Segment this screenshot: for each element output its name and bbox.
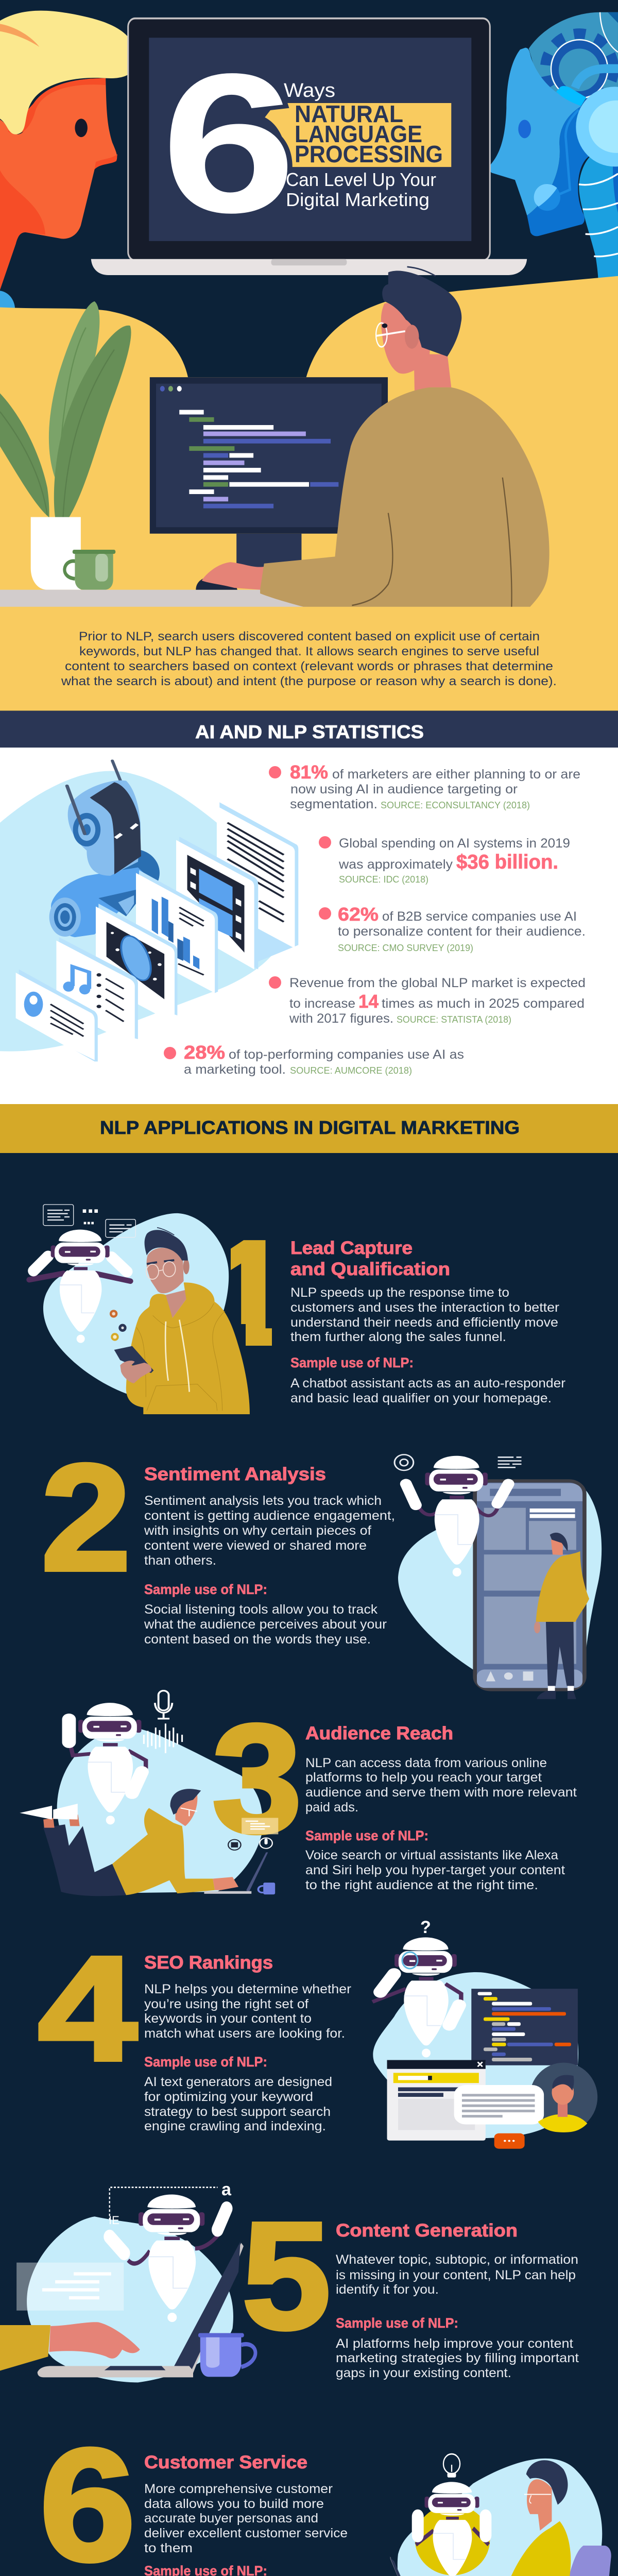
panel: 3 audience reach [20,1691,577,1896]
text: lead capture: A chatbot assistant acts as an auto-responder [290,1376,565,1391]
chatbot [394,1937,457,2057]
text: lead capture: understand their needs and efficiently move [290,1315,558,1330]
stat: 62% of B2B: SOURCE: CMO SURVEY (2019) [338,943,473,953]
stat: 81% of marketers: now using AI in audience targeting or [290,782,518,796]
text: customer service: accurate buyer personas and [144,2511,318,2526]
chatbot [425,1456,488,1577]
letter a: a [221,2180,232,2199]
title: big 6: 6 [161,32,296,254]
title: text lines [284,80,443,210]
stat: 28% of top-performing [164,1042,464,1077]
illustration: person and icons [20,1691,278,1896]
text: SEO rankings: Sample use of NLP: [144,2054,267,2070]
text: SEO rankings: engine crawling and indexing. [144,2119,326,2133]
stat: 28% of top-performing: a marketing tool. [184,1062,286,1077]
text: content generation: AI platforms help improve your content [336,2336,573,2351]
stat: $36 billion [319,836,570,885]
text: SEO rankings [144,1953,351,2133]
chatbot [139,2195,204,2322]
panel: AI and NLP statistics [0,711,618,1104]
illustration: man with phone and chatbot [29,1205,250,1414]
stat: 28% of top-performing: 28% [184,1042,225,1063]
big number 2: 2 [41,1433,131,1602]
heading band: statistics [0,711,618,748]
big number 3: 3 [212,1693,302,1865]
title: text lines: Digital Marketing [286,189,430,210]
panel: 1 lead capture [29,1205,565,1414]
panel: 5 content generation [0,2180,579,2382]
illustration: chatbot with code panel and browser [372,1972,597,2149]
big number 4: 4 [38,1926,138,2092]
stat: 62% of B2B: 62% [338,904,379,925]
magnifier [402,1952,418,1969]
text: audience reach: to the right audience at the right time. [305,1878,538,1892]
stat: 62% of B2B: to personalize content for their audience. [338,924,586,939]
stat: 14 times [269,976,586,1026]
text: sentiment analysis: Social listening tools allow you to track [144,1602,378,1617]
text: content generation: gaps in your existing content. [336,2366,511,2380]
letters IE: IE [109,2214,119,2227]
illustration: AI head [490,12,618,282]
stat: $36 billion: Global spending on AI systems in 2019 [339,836,570,851]
heading band: NLP applications: NLP APPLICATIONS IN DIGITAL MARKETING [100,1117,520,1138]
text: sentiment analysis: content is getting audience engagement, [144,1509,395,1523]
title: yellow banner [265,103,451,167]
chatbot [425,2482,479,2576]
text: customer service: Customer Service [144,2452,307,2472]
white background [0,747,618,1104]
stat: 14 times: times as much in 2025 compared [382,996,585,1011]
text: lead capture: Lead Capture [290,1238,413,1258]
illustration: person on couch with chatbot [390,2454,611,2576]
illustration: phone, chatbot and person [394,1454,602,1699]
stat: 62% of B2B [319,904,586,953]
text: content generation: marketing strategies by filling important [336,2351,579,2365]
chatbot [78,1703,141,1824]
stat: $36 billion: SOURCE: IDC (2018) [339,874,428,885]
stat: 14 times: to increase [289,996,355,1011]
big number 1: 1 [209,1210,291,1378]
text: SEO rankings: AI text generators are designed [144,2075,332,2089]
text: lead capture [290,1238,565,1405]
text: audience reach: platforms to help you reach your target [305,1770,542,1785]
illustration: isometric robot and media pages [0,760,298,1061]
panel: 4 SEO rankings [38,1918,597,2149]
text: content generation: identify it for you. [336,2282,439,2297]
heading band: statistics: AI AND NLP STATISTICS [195,721,424,742]
title: text lines: Ways [284,80,335,101]
panel: 6 customer service [40,2415,611,2576]
stat: 14 times: with 2017 figures. [289,1011,393,1026]
text: lead capture: NLP speeds up the response time to [290,1285,509,1300]
title: text lines: NATURAL [295,100,403,127]
illustration: laptop [91,19,527,275]
text: audience reach: Audience Reach [305,1723,453,1743]
panel: hero [0,11,618,711]
panel: 2 sentiment analysis [41,1433,602,1699]
text: customer service: data allows you to build more [144,2497,324,2511]
text: sentiment analysis: what the audience perceives about your [144,1617,387,1632]
text: sentiment analysis: Sample use of NLP: [144,1582,267,1597]
illustration: monitor with code [150,377,388,568]
text: audience reach [305,1723,577,1892]
text: content generation: is missing in your content, NLP can help [336,2268,576,2282]
text: customer service: deliver excellent customer service [144,2526,348,2540]
text: SEO rankings: NLP helps you determine whether [144,1982,351,1996]
intro paragraph: content to searchers based on context (relevant words or phrases that determine [65,659,553,673]
text: lead capture: and Qualification [290,1259,450,1279]
stat: 14 times: Revenue from the global NLP market is expected [289,976,586,990]
text: content generation [336,2221,579,2380]
yellow background [0,276,618,711]
text: audience reach: Sample use of NLP: [305,1828,428,1843]
text: audience reach: paid ads. [305,1800,358,1815]
text: sentiment analysis: Sentiment Analysis [144,1464,326,1484]
title [161,32,451,254]
intro paragraph [61,630,557,688]
title: text lines: PROCESSING [295,141,443,167]
title: text lines: Can Level Up Your [286,169,436,190]
text: customer service: More comprehensive customer [144,2482,333,2496]
illustration: person lying with laptop and chatbot [57,1719,263,1893]
heading band: NLP applications [0,1104,618,1153]
illustration: human head [0,11,136,309]
text: audience reach: audience and serve them with more relevant [305,1785,577,1800]
text: lead capture: and basic lead qualifier on your homepage. [290,1391,552,1405]
stat: 14 times: 14 [358,991,379,1012]
text: sentiment analysis: than others. [144,1553,216,1568]
title: text lines: LANGUAGE [295,121,422,147]
stat: 14 times: SOURCE: STATISTA (2018) [397,1014,511,1025]
stat: 28% of top-performing: of top-performing companies use AI as [229,1047,464,1062]
stat: 28% of top-performing: SOURCE: AUMCORE (2018) [290,1065,412,1076]
text: SEO rankings: keywords in your content to [144,2011,312,2026]
text: SEO rankings: you’re using the right set of [144,1997,308,2011]
text: lead capture: customers and uses the interaction to better [290,1300,559,1315]
stat: 81% of marketers: segmentation. [290,797,377,811]
stat: 81% of marketers: SOURCE: ECONSULTANCY (2018) [381,800,530,810]
text: customer service: to them [144,2541,193,2555]
illustration: plant and mug [0,301,131,590]
stat: $36 billion: $36 billion. [456,851,558,873]
text: audience reach: and Siri help you hyper-target your content [305,1863,565,1877]
text: lead capture: them further along the sales funnel. [290,1330,506,1344]
text: content generation: Content Generation [336,2221,518,2241]
intro paragraph: Prior to NLP, search users discovered content based on explicit use of certain [79,630,540,643]
text: sentiment analysis: with insights on why certain pieces of [144,1523,371,1538]
text: SEO rankings: for optimizing your keyword [144,2090,313,2104]
big number 5: 5 [242,2191,331,2361]
text: SEO rankings: match what users are looking for. [144,2026,345,2041]
text: customer service [144,2452,356,2576]
stat: 81% of marketers: of marketers are either planning to or are [332,767,580,782]
text: lead capture: Sample use of NLP: [290,1355,414,1370]
text: sentiment analysis: content based on the words they use. [144,1632,371,1647]
text: SEO rankings: strategy to best support search [144,2105,331,2119]
illustration: chatbot, laptop and hand [0,2188,255,2382]
text: sentiment analysis: Sentiment analysis lets you track which [144,1494,382,1508]
stat: 81% of marketers: 81% [290,761,328,783]
illustration: man at desk [0,267,550,607]
stat: 62% of B2B: of B2B service companies use AI [382,909,577,924]
text: content generation: Whatever topic, subtopic, or information [336,2252,578,2267]
intro paragraph: keywords, but NLP has changed that. It allows search engines to serve useful [79,645,539,658]
text: content generation: Sample use of NLP: [336,2315,458,2331]
intro paragraph: what the search is about) and intent (the purpose or reason why a search is done). [61,674,557,688]
stat: 81% of marketers [269,761,580,811]
text: sentiment analysis [144,1464,395,1647]
question mark: ? [420,1918,431,1937]
text: SEO rankings: SEO Rankings [144,1953,273,1973]
text: audience reach: Voice search or virtual assistants like Alexa [305,1848,558,1862]
text: audience reach: NLP can access data from various online [305,1756,547,1770]
stat: $36 billion: was approximately [338,857,453,872]
text: sentiment analysis: content were viewed or shared more [144,1538,367,1553]
